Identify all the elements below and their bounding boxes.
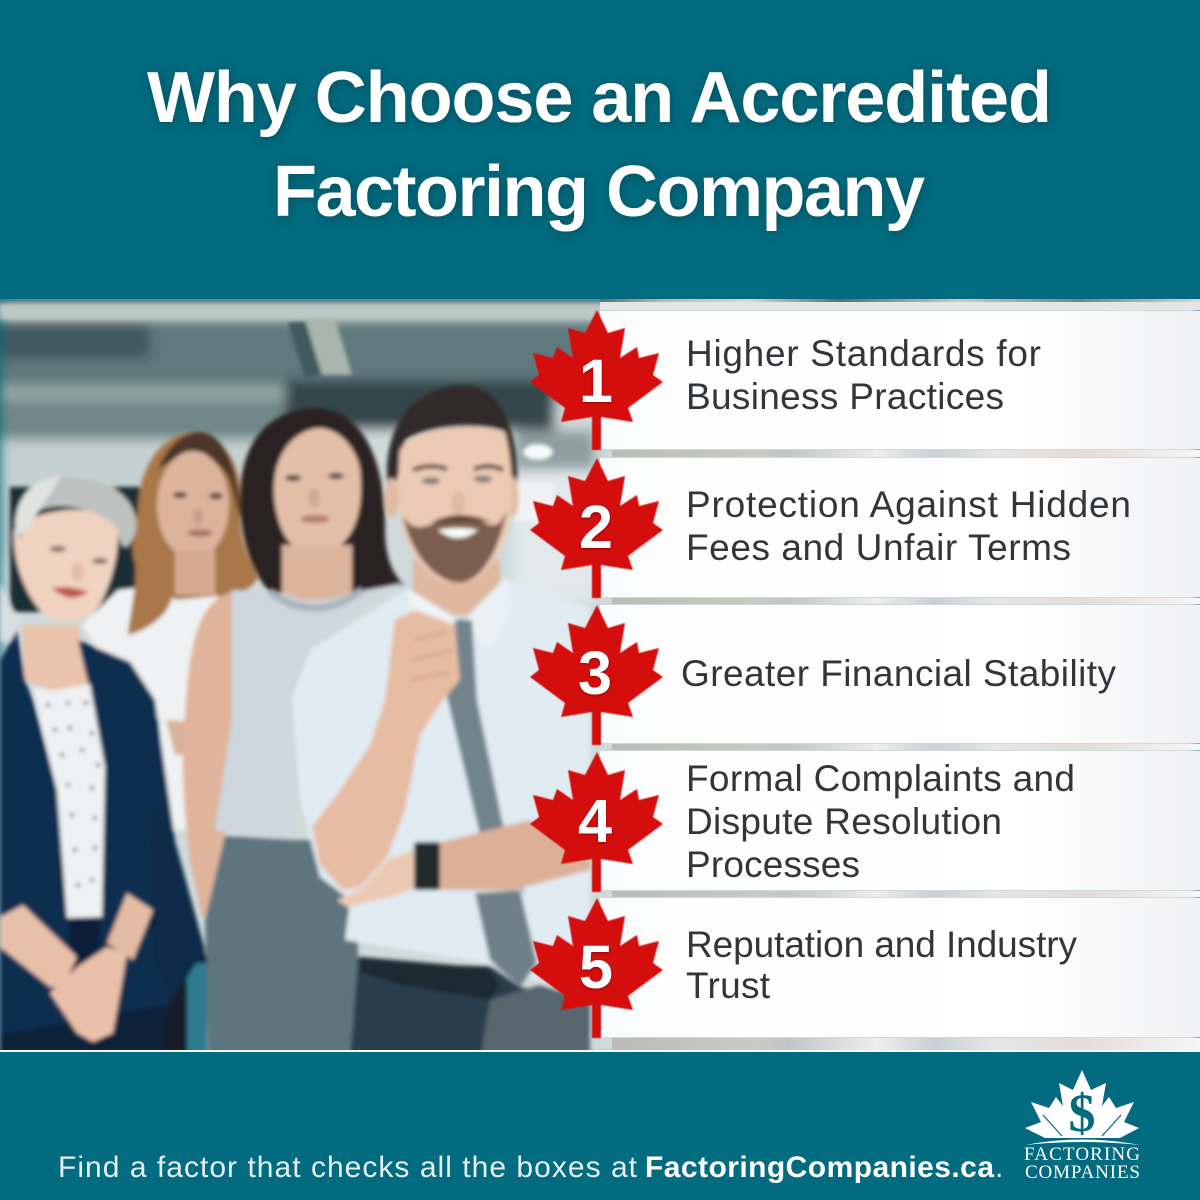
strips between panels bbox=[600, 299, 1200, 1050]
item 1 text bbox=[686, 333, 1041, 417]
person far left edge bbox=[0, 582, 18, 642]
item 3 text: Greater Financial Stability bbox=[681, 653, 1116, 694]
man bbox=[292, 385, 590, 1060]
white divider above footer bbox=[0, 1050, 1200, 1052]
woman 3 bbox=[183, 408, 405, 1060]
title: Factoring Company bbox=[273, 152, 925, 232]
logo: Factoring Companies: $ bbox=[1068, 1083, 1096, 1143]
maple leaf number 3: 3 bbox=[578, 639, 612, 707]
maple leaf number 2: 2 bbox=[579, 493, 613, 561]
maple leaf number 1 bbox=[530, 310, 663, 450]
item 4 text bbox=[686, 758, 1075, 885]
item 2 text bbox=[686, 484, 1131, 568]
maple leaf number 3 bbox=[530, 605, 663, 745]
item 4 text: Processes bbox=[686, 844, 860, 885]
title: Why Choose an Accredited bbox=[147, 58, 1052, 138]
item 5 text bbox=[686, 924, 1078, 1006]
panel 1 background bbox=[600, 311, 1200, 449]
footer call to action: Find a factor that checks all the boxes at bbox=[58, 1151, 638, 1184]
item 2 text: Fees and Unfair Terms bbox=[686, 527, 1071, 568]
header band bbox=[0, 0, 1200, 299]
team photo bbox=[0, 299, 1200, 1060]
logo: Factoring Companies bbox=[1024, 1070, 1140, 1183]
woman 1 bbox=[0, 476, 207, 1060]
footer call to action: FactoringCompanies.ca bbox=[645, 1151, 994, 1184]
footer call to action: . bbox=[995, 1151, 1003, 1184]
maple leaf number 5: 5 bbox=[579, 933, 613, 1001]
panel 3 background bbox=[600, 605, 1200, 743]
woman 2 bbox=[82, 432, 258, 830]
maple leaf number 4 bbox=[530, 752, 663, 892]
footer band bbox=[0, 1052, 1200, 1200]
maple leaf number 5 bbox=[530, 898, 663, 1038]
maple leaf number 4: 4 bbox=[578, 787, 612, 855]
item 2 text: Protection Against Hidden bbox=[686, 484, 1131, 525]
panel 5 background bbox=[600, 898, 1200, 1037]
item 4 text: Dispute Resolution bbox=[686, 801, 1002, 842]
panel 2 background bbox=[600, 458, 1200, 597]
office background bbox=[0, 299, 1200, 1059]
footer call to action bbox=[58, 1151, 1003, 1184]
panel 4 background bbox=[600, 751, 1200, 890]
maple leaf number 2 bbox=[530, 458, 663, 598]
item 5 text: Trust bbox=[686, 965, 771, 1006]
logo: Factoring Companies: FACTORING bbox=[1024, 1144, 1140, 1165]
item 1 text: Business Practices bbox=[686, 376, 1004, 417]
maple leaf number 1: 1 bbox=[579, 347, 613, 415]
item 4 text: Formal Complaints and bbox=[686, 758, 1075, 799]
item 1 text: Higher Standards for bbox=[686, 333, 1041, 374]
item 5 text: Reputation and Industry bbox=[686, 924, 1078, 965]
title bbox=[147, 58, 1052, 232]
logo: Factoring Companies: COMPANIES bbox=[1025, 1162, 1140, 1183]
